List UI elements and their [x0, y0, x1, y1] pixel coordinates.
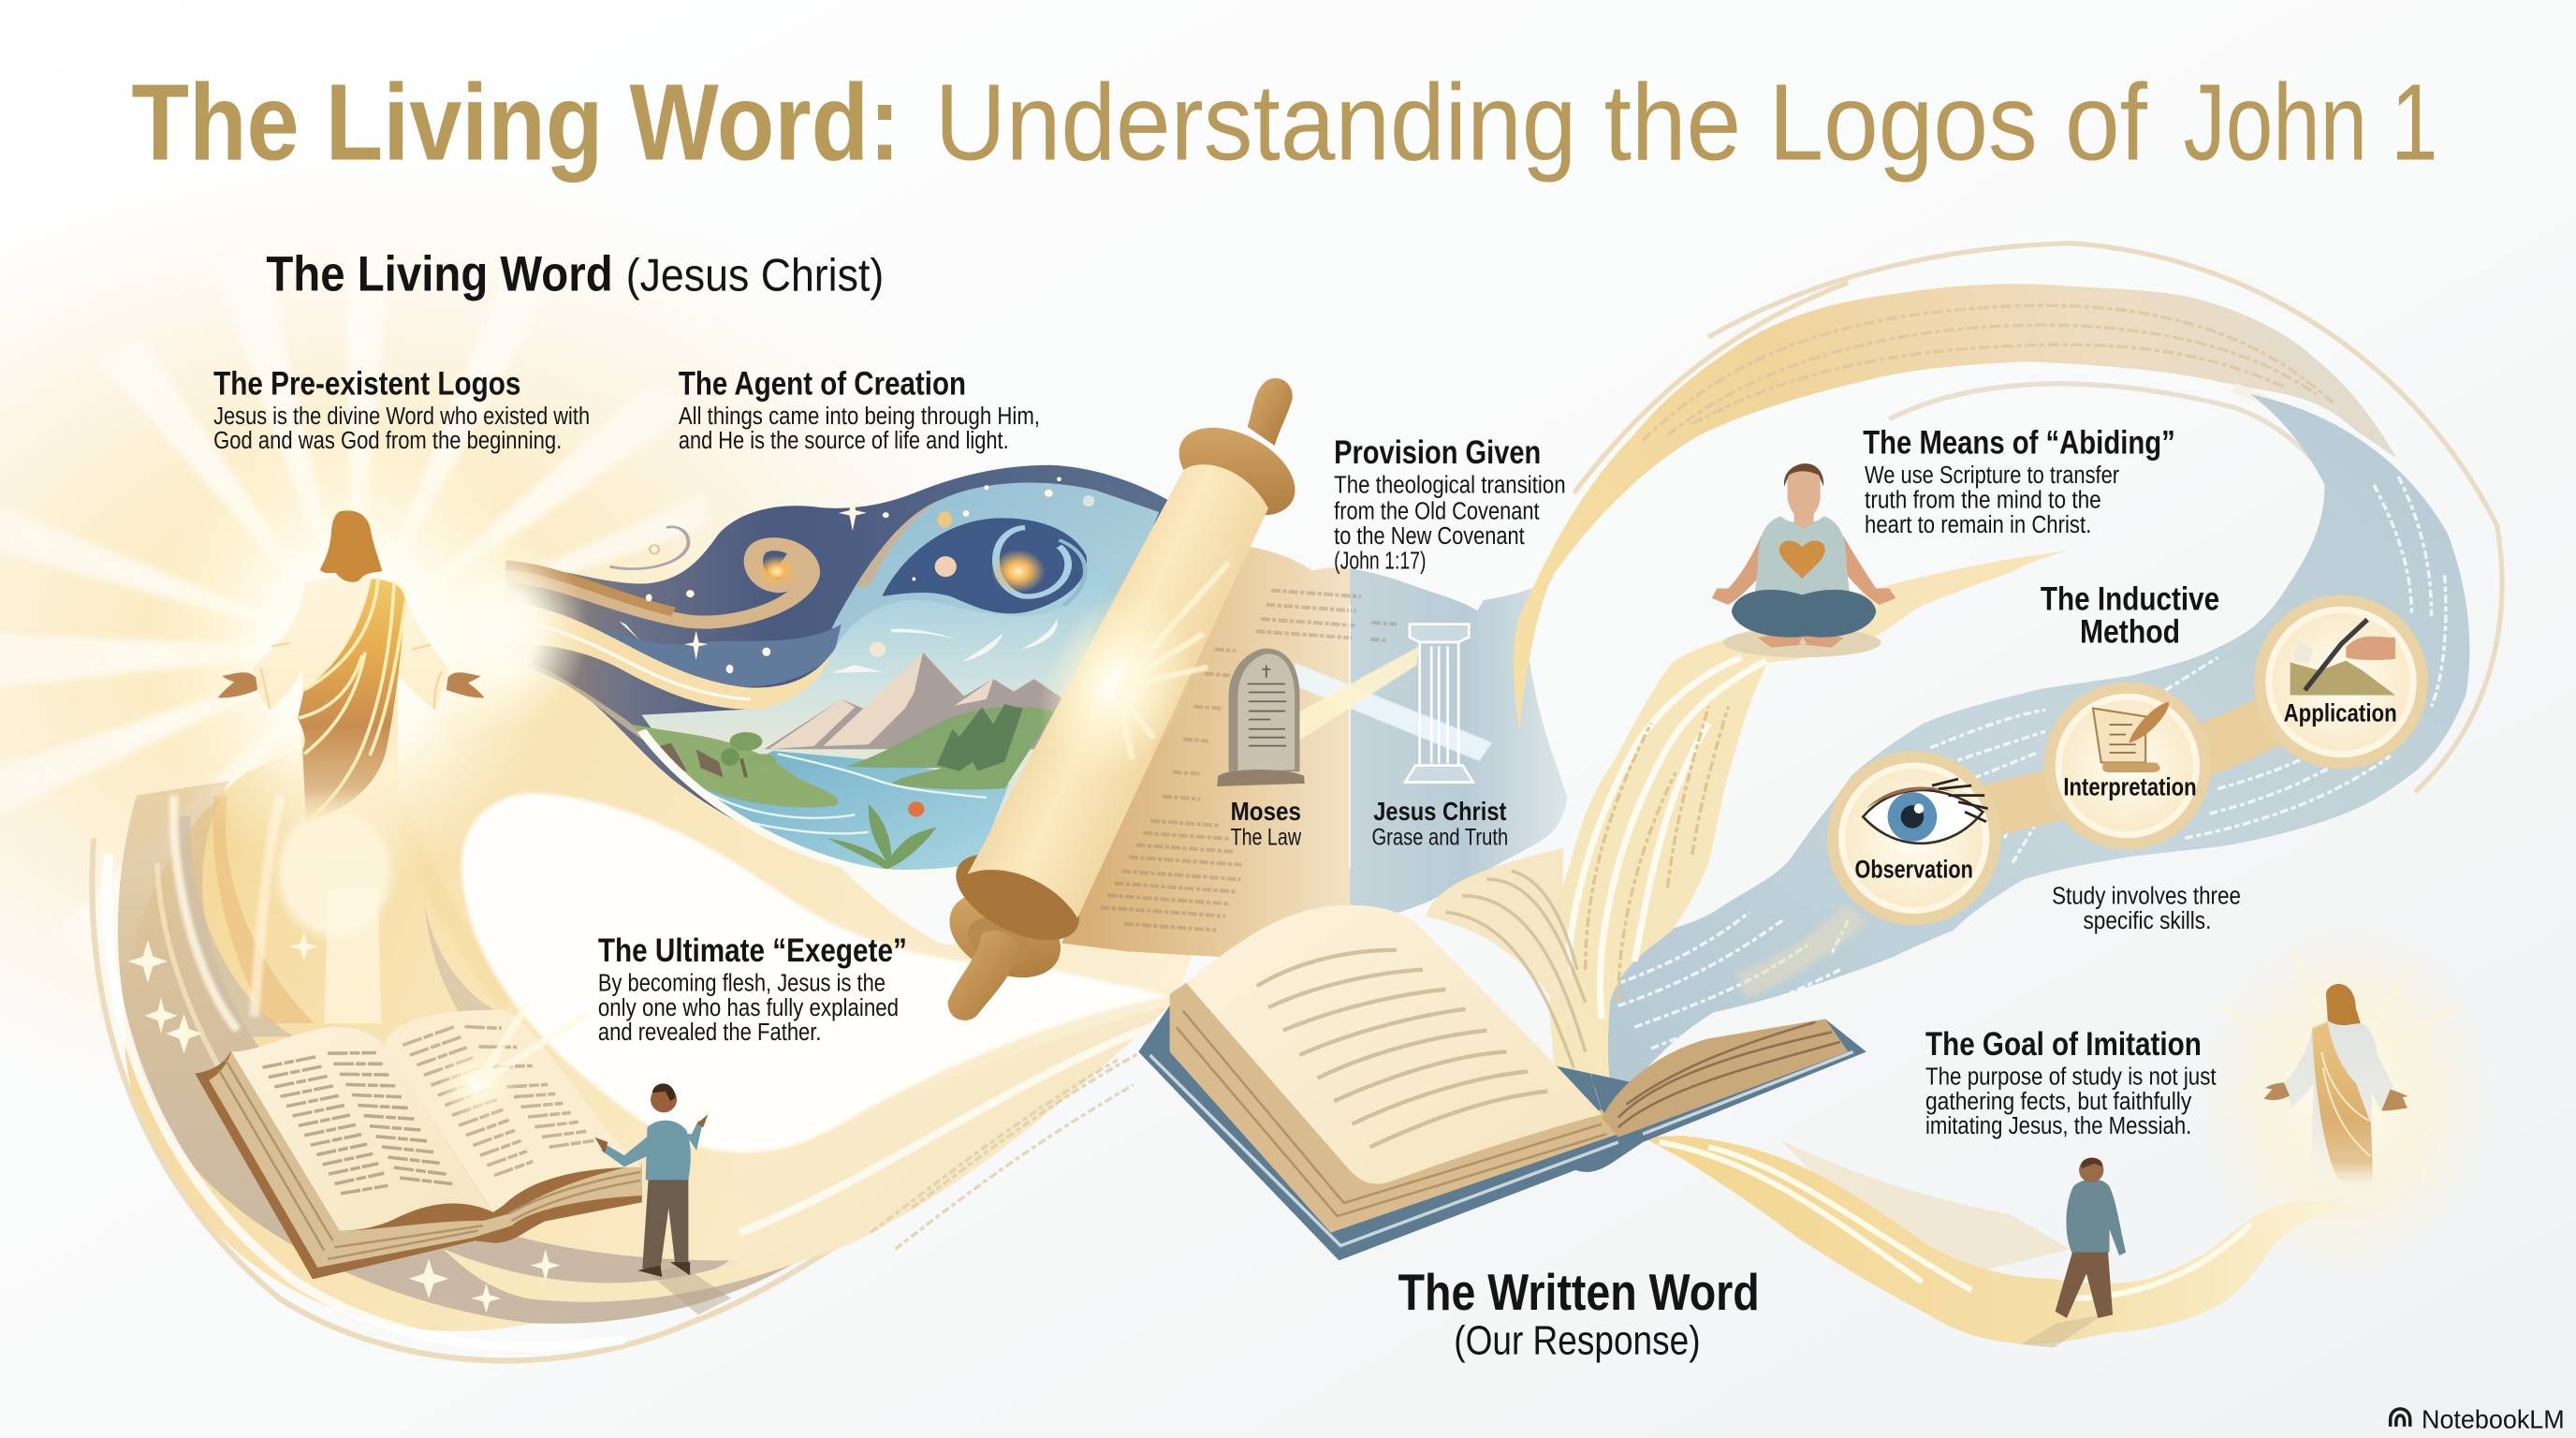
icon: Jesus Christ column: [1405, 624, 1473, 782]
upper cap: [1164, 410, 1310, 534]
head: [651, 1086, 677, 1112]
legs: [642, 1170, 688, 1269]
text: Provision Given: from the Old Covenant: [1334, 497, 1540, 525]
icon: NotebookLM: [2391, 1409, 2410, 1427]
text: The Goal of Imitation: The purpose of study is not just: [1925, 1063, 2217, 1091]
text: Provision Given: Provision Given: [1334, 434, 1541, 471]
left page: [1186, 905, 1602, 1184]
left page text lines: [262, 1053, 452, 1194]
white lower edge: [641, 730, 980, 873]
text: Provision Given: The theological transition: [1334, 471, 1566, 499]
navy swirl blob: [882, 518, 1087, 613]
heading: The Written Word: (Our Response): [1454, 1317, 1701, 1363]
label: Moses: [1231, 797, 1301, 850]
application circle: [2254, 594, 2428, 770]
golden path to right Jesus: [1643, 1136, 2365, 1344]
legs: [1732, 590, 1876, 638]
meditating figure: [1712, 463, 1895, 657]
icon: eye: [1863, 779, 1988, 844]
right page: [385, 1010, 642, 1212]
label: Observation: Observation: [1855, 854, 1973, 883]
tan link through circles: [1914, 682, 2341, 838]
hair: [2326, 984, 2361, 1025]
main title: The Living Word:: [131, 61, 900, 183]
curl: [610, 527, 688, 569]
torso: [646, 1121, 691, 1180]
right page text lines: [402, 1027, 593, 1176]
label: Jesus Christ: Grase and Truth: [1372, 825, 1508, 850]
cream wash under the book: [444, 1005, 1170, 1302]
text: The Ultimate Exegete: [598, 932, 907, 1046]
text: The Agent of Creation: The Agent of Creation: [679, 365, 966, 402]
sash: [298, 580, 405, 823]
label: Jesus Christ: Jesus Christ: [1373, 797, 1506, 826]
right page block: [1602, 1019, 1848, 1137]
legs: [2056, 1249, 2113, 1318]
mountains: [764, 653, 1063, 749]
shirt: [1754, 516, 1850, 594]
heading: The Written Word: [1398, 1264, 1760, 1363]
page block: [209, 1051, 642, 1268]
parchment script: [1099, 580, 1398, 941]
arms: [1712, 536, 1895, 605]
rising page: [1426, 848, 1602, 1111]
hands: [218, 672, 484, 697]
planets: [935, 556, 957, 577]
white clouds and bird shapes: [619, 618, 1058, 673]
text: The Inductive Method: [2041, 580, 2219, 650]
tan crescent: [118, 781, 805, 1324]
left land: [633, 725, 838, 807]
lower ring: [943, 836, 1092, 958]
text: The Inductive Method: Method: [2080, 613, 2180, 650]
glow rays: [2217, 953, 2459, 1186]
main title: John 1: [2184, 61, 2438, 183]
tree: [741, 758, 746, 777]
text: The Agent of Creation: All things came into being through Him,: [679, 402, 1040, 430]
text: The Goal of Imitation: imitating Jesus, the Messiah.: [1925, 1111, 2191, 1139]
main title: Understanding the Logos of: [935, 61, 2148, 183]
text: The Agent of Creation: and He is the source of life and light.: [679, 426, 1009, 454]
text: The Inductive Method: The Inductive: [2041, 580, 2219, 617]
text: The Pre-existent Logos: Jesus is the divine Word who existed with: [213, 402, 590, 430]
glow softening the wave start: [398, 531, 588, 735]
speckled tan band: [505, 653, 660, 749]
text: Provision Given: [1334, 434, 1566, 574]
blue ribbon carrying the inductive method: [1553, 394, 2469, 1105]
light blue sky band: [822, 482, 1159, 674]
text: The Goal of Imitation: gathering fects, but faithfully: [1925, 1087, 2192, 1115]
text: Provision Given: (John 1:17): [1334, 546, 1426, 574]
text: The Goal of Imitation: The Goal of Imitation: [1925, 1026, 2202, 1063]
big open book: [1138, 848, 1866, 1260]
label: Application: Application: [2284, 698, 2397, 727]
light spark: [438, 1047, 519, 1121]
right land: [846, 706, 1055, 789]
outer thin lines: [93, 838, 879, 1360]
text: The Goal of Imitation: [1925, 1026, 2217, 1139]
feet: [1758, 629, 1843, 648]
robe and sleeves: [252, 577, 449, 861]
text: The Ultimate Exegete: only one who has fully explained: [598, 993, 899, 1021]
text: The Means of Abiding: [1863, 424, 2175, 538]
head: [1788, 469, 1821, 520]
hair: [320, 510, 382, 582]
text: The Pre-existent Logos: God and was God from the beginning.: [213, 426, 562, 454]
label: Interpretation: Interpretation: [2063, 772, 2197, 801]
lower outer cap: [936, 875, 1075, 994]
arms: [601, 1121, 703, 1167]
text: The Pre-existent Logos: [213, 365, 590, 454]
icon: hand writing on a hill: [2291, 620, 2395, 696]
bloom around Jesus: [148, 411, 559, 888]
night sky: [505, 465, 1173, 870]
white script lines: [1610, 477, 2446, 1049]
left golden glow with rays: [0, 156, 1060, 1142]
scroll roll with handles: [936, 378, 1310, 1020]
trees: [937, 704, 1023, 771]
text: The Ultimate Exegete: By becoming flesh, Jesus is the: [598, 969, 886, 997]
white opening behind the Exegete text: [461, 793, 1170, 1152]
Jesus figure, left: [218, 510, 484, 861]
divider: [1348, 605, 1352, 868]
heading: The Living Word: [266, 247, 884, 302]
water: [696, 751, 1009, 870]
text: The Ultimate Exegete: and revealed the Father.: [598, 1018, 822, 1046]
book cover: [195, 1051, 642, 1279]
text: The Pre-existent Logos: The Pre-existent Logos: [213, 365, 520, 402]
flower plant: [827, 804, 937, 870]
fade line between arc and blue band: [2234, 388, 2415, 518]
label: Moses: Moses: [1231, 797, 1301, 826]
scroll parchment sheet with covenant comparison: [1061, 546, 1567, 960]
burst on roll: [1009, 563, 1222, 805]
man speaking beside the book: [594, 1083, 731, 1314]
stars: [646, 477, 1061, 673]
Jesus figure, right, with glow: [2198, 920, 2494, 1282]
lower-left blue band: [592, 624, 842, 687]
small open book at left: [195, 1004, 642, 1279]
text: Provision Given: to the New Covenant: [1334, 521, 1525, 550]
text: three skills caption: [2052, 881, 2241, 934]
big left ribbon sweeping around under Jesus: [93, 609, 1199, 1360]
observation circle: [1827, 751, 2001, 925]
figure drawn at source scale: [2263, 984, 2408, 1196]
icon: scroll and quill: [2093, 702, 2169, 772]
left page block: [1170, 983, 1618, 1233]
head: [2079, 1158, 2103, 1182]
parchment: [1061, 546, 1567, 960]
heading: The Written Word: The Written Word: [1398, 1264, 1760, 1321]
pale wash beside path: [1781, 1140, 2070, 1282]
robe: [2284, 1020, 2393, 1196]
text: The Means of Abiding: We use Scripture to transfer: [1865, 461, 2119, 489]
heart: [1779, 540, 1825, 579]
lower sky: [641, 559, 1109, 868]
roll body: [968, 464, 1268, 918]
heading: The Living Word: The Living Word: [266, 247, 613, 302]
upper knob: [1248, 378, 1293, 446]
text: The Means of Abiding: heart to remain in Christ.: [1865, 510, 2091, 538]
label: Jesus Christ: [1372, 797, 1508, 850]
NotebookLM logo: NotebookLM: [2422, 1404, 2565, 1433]
text: The Means of Abiding: The Means of “Abiding”: [1863, 424, 2175, 461]
arc ribbon over the right side: [1514, 243, 2502, 792]
sash folds: [299, 578, 405, 823]
golden ribbon rising from the book: [1549, 550, 2069, 1118]
lower knob: [948, 931, 1019, 1020]
walking figure: [2021, 1158, 2126, 1347]
river lines: [705, 754, 987, 833]
torso and arm: [2066, 1180, 2126, 1255]
inductive method circles: [1827, 594, 2428, 925]
sparkles: [128, 932, 560, 1313]
interpretation circle: [2043, 682, 2211, 850]
text: The Ultimate Exegete: The Ultimate “Exegete”: [598, 932, 907, 969]
creation wave: cosmos and landscape: [505, 465, 1173, 873]
text: three skills caption: specific skills.: [2083, 906, 2211, 934]
thin outer lines: [1708, 243, 2502, 792]
soft strands in the crescent: [157, 796, 508, 1164]
main title: [131, 61, 2438, 183]
sleeve trim: [260, 643, 442, 709]
light beams: [1295, 663, 1492, 761]
label: Moses: The Law: [1231, 825, 1301, 850]
cream wave: [505, 603, 832, 710]
text: The Means of Abiding: truth from the mind to the: [1865, 485, 2101, 513]
tan spiral: [505, 544, 811, 623]
hands: [2263, 1082, 2408, 1111]
sash: [2312, 1022, 2373, 1183]
blue cover: [1138, 986, 1866, 1260]
text: The Agent of Creation: [679, 365, 1040, 454]
icon: Moses tablet: [1217, 649, 1305, 786]
lower right wash with faint script: [707, 1005, 1166, 1273]
heading: The Living Word: (Jesus Christ): [626, 251, 884, 301]
text: three skills caption: Study involves three: [2052, 881, 2241, 909]
left page: [231, 1027, 493, 1231]
